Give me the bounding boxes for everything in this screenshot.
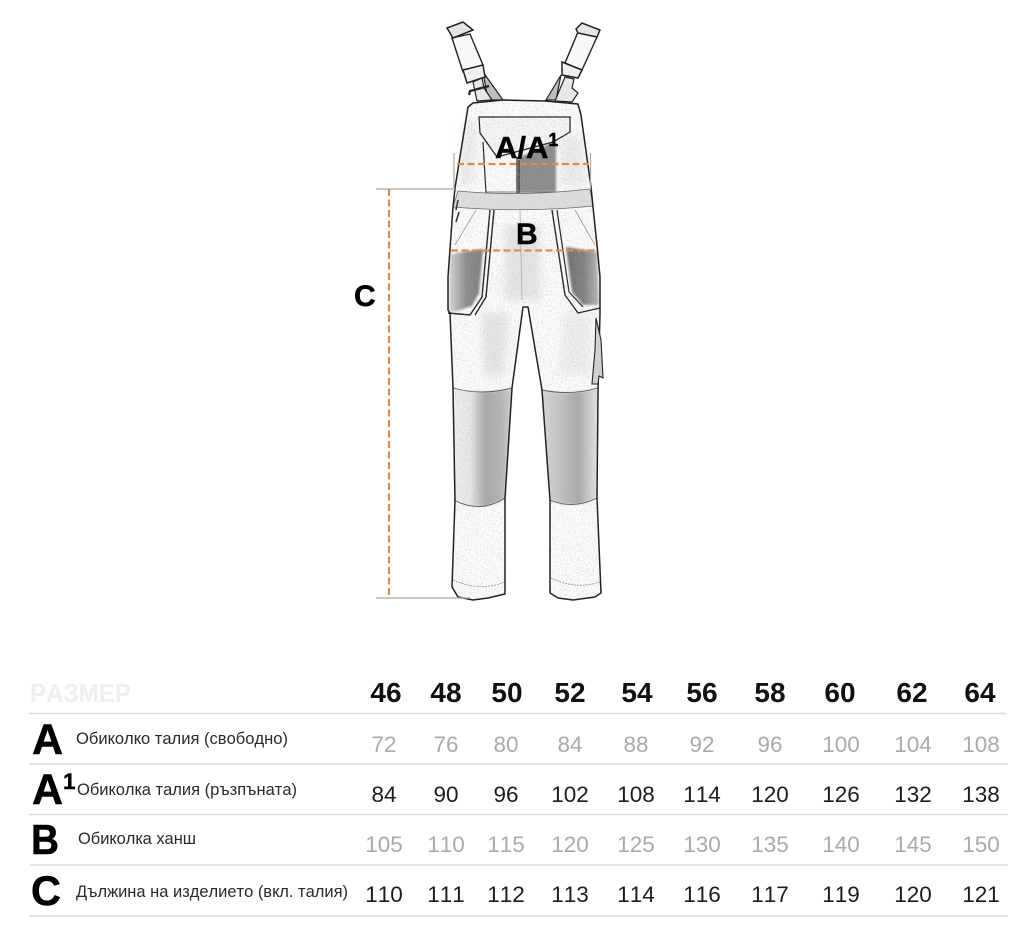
cargo side pocket — [592, 318, 603, 384]
table row B: 130 — [683, 832, 721, 857]
table row A1: 120 — [751, 782, 789, 807]
table row B: 125 — [617, 832, 655, 857]
table row A1: 138 — [962, 782, 1000, 807]
table header row — [30, 677, 996, 708]
garment outline — [448, 100, 601, 600]
waistband — [453, 189, 593, 210]
table header row: РАЗМЕР — [30, 678, 131, 708]
table row C: Дължина на изделието (вкл. талия) — [76, 883, 348, 901]
table row A1 — [32, 766, 1000, 814]
table row C: C — [31, 867, 61, 914]
size table — [29, 677, 1008, 916]
table header row: 62 — [896, 677, 928, 708]
illustration: work overalls sketch — [445, 22, 605, 602]
table rules — [29, 714, 1008, 916]
hip pocket panels — [448, 200, 600, 315]
table row B: 110 — [427, 832, 465, 857]
table row C: 120 — [894, 882, 932, 907]
table row A1: 132 — [894, 782, 932, 807]
soft fabric shading — [460, 120, 590, 375]
table header row: 64 — [964, 677, 996, 708]
table row B: 140 — [822, 832, 860, 857]
table row A: Обиколко талия (свободно) — [76, 730, 288, 748]
table row A1: 102 — [551, 782, 589, 807]
table row B: 115 — [487, 832, 525, 857]
table row C: 110 — [365, 882, 403, 907]
table row C: 113 — [551, 882, 589, 907]
table row C — [31, 867, 1000, 914]
table row C: 121 — [962, 882, 1000, 907]
table row A: 72 — [371, 732, 397, 757]
table row C: 116 — [683, 882, 721, 907]
label B: B — [516, 218, 538, 251]
table header row: 56 — [686, 677, 718, 708]
table header row: 48 — [430, 677, 462, 708]
table row C: 114 — [617, 882, 655, 907]
table row B: B — [31, 816, 59, 863]
dashed measure A — [457, 163, 589, 165]
dashed measure B — [451, 249, 597, 252]
table row B: 120 — [551, 832, 589, 857]
right shoulder strap — [546, 23, 600, 102]
table row A1: 114 — [683, 782, 721, 807]
table row A: 88 — [623, 732, 649, 757]
garment body — [448, 100, 601, 600]
dashed measure C — [388, 189, 390, 598]
table row A: 104 — [894, 732, 932, 757]
table row A1: 96 — [493, 782, 519, 807]
table row C: 119 — [822, 882, 860, 907]
measurement lines — [376, 153, 590, 598]
table row B: 145 — [894, 832, 932, 857]
bib pocket with dark panel — [479, 117, 570, 193]
table row A: A — [32, 716, 63, 764]
table row B: 135 — [751, 832, 789, 857]
table header row: 52 — [554, 677, 586, 708]
table row B: 150 — [962, 832, 1000, 857]
table row A1: 126 — [822, 782, 860, 807]
table row A1: 108 — [617, 782, 655, 807]
sketch texture — [445, 100, 605, 602]
table row A1: A — [32, 766, 63, 814]
table header row: 58 — [754, 677, 786, 708]
left shoulder strap — [447, 22, 503, 101]
table row A: 80 — [493, 732, 519, 757]
table row A: 92 — [689, 732, 715, 757]
table row A1: Обиколка талия (ръзпъната) — [77, 781, 297, 799]
table row A1: 1 — [63, 769, 75, 794]
table header row: 46 — [370, 677, 402, 708]
table header row: 60 — [824, 677, 856, 708]
table row A1: 84 — [371, 782, 397, 807]
table row B: 105 — [365, 832, 403, 857]
table row B: Обиколка ханш — [78, 830, 196, 848]
table row C: 112 — [487, 882, 525, 907]
table row A: 108 — [962, 732, 1000, 757]
knee patches — [453, 388, 600, 587]
table row C: 111 — [427, 882, 465, 907]
table row A1: 90 — [433, 782, 459, 807]
table row A: 76 — [433, 732, 459, 757]
label C: C — [354, 280, 376, 313]
guide lines — [376, 153, 590, 598]
table row A — [32, 716, 1000, 764]
table row A: 84 — [557, 732, 583, 757]
label A/A1: A/A — [495, 130, 548, 165]
table header row: 50 — [491, 677, 523, 708]
table row A: 96 — [757, 732, 783, 757]
table header row: 54 — [621, 677, 653, 708]
table row C: 117 — [751, 882, 789, 907]
table row B — [31, 816, 1000, 863]
label A/A1: 1 — [548, 130, 558, 150]
table row A: 100 — [822, 732, 860, 757]
